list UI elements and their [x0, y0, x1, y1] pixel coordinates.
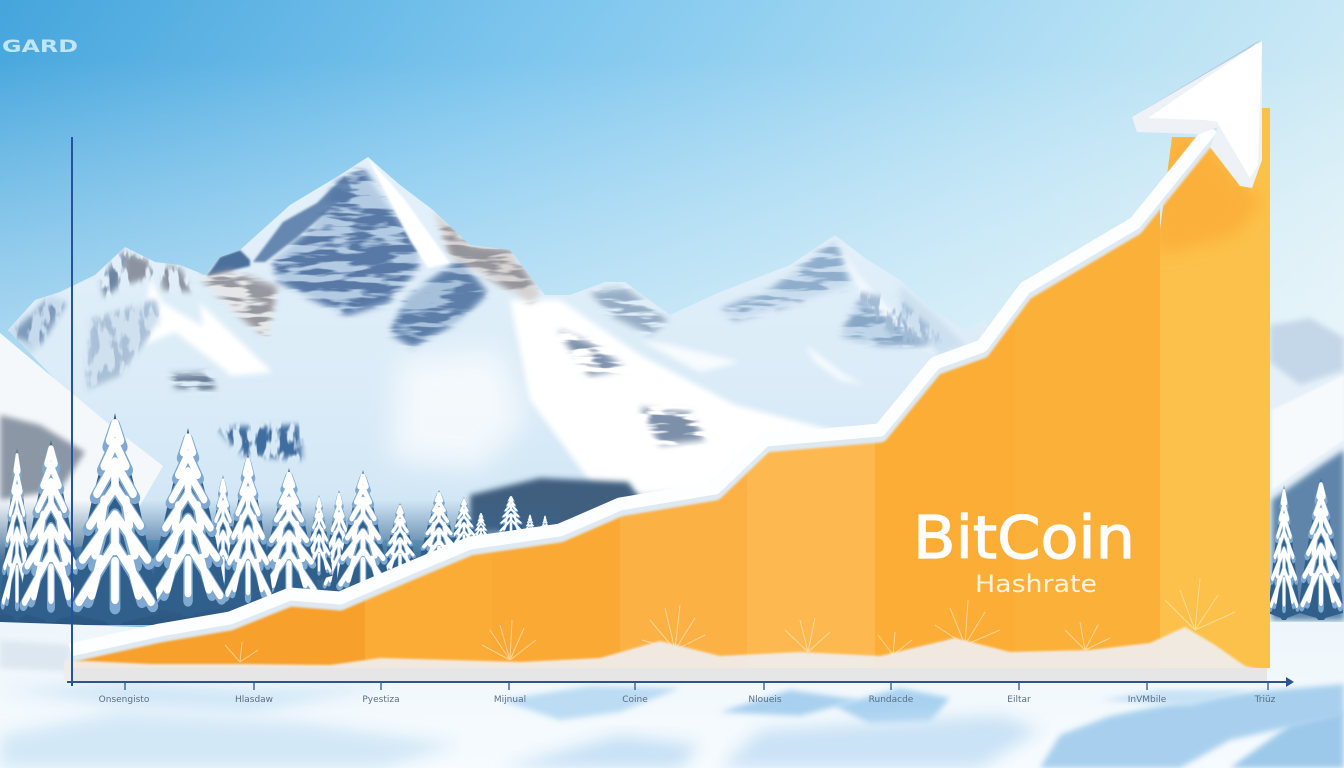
- x axis labels: InVMbile: [1128, 695, 1167, 705]
- tree: [19, 440, 83, 622]
- chart: hashrate area: [64, 100, 1270, 681]
- snow shadows: [0, 682, 400, 712]
- frost bursts: [225, 578, 1235, 662]
- far right mountains: [1265, 318, 1344, 620]
- x axis labels: [99, 695, 1276, 705]
- lighter right panel: [1160, 108, 1270, 668]
- x axis with arrow: [67, 677, 1294, 690]
- tree: [206, 475, 240, 595]
- rock base tones: [8, 168, 965, 390]
- x axis labels: Rundacde: [869, 695, 914, 705]
- x axis labels: Nloueis: [748, 695, 782, 705]
- tree: [540, 515, 550, 535]
- tree: [1, 448, 33, 620]
- trend arrow head: [1132, 40, 1262, 188]
- tree: [306, 495, 332, 580]
- tree: [336, 470, 390, 598]
- tree: [524, 514, 536, 536]
- snow bank along chart base: [64, 627, 1262, 681]
- title: BitCoin Hashrate: Hashrate: [975, 570, 1097, 598]
- snow body of the range: [8, 157, 1000, 540]
- tree: [223, 453, 273, 611]
- mountain range: [8, 157, 1000, 540]
- tree: [472, 512, 490, 546]
- valley forest: [470, 478, 640, 532]
- left foreground slope: [0, 333, 163, 560]
- tree: [419, 490, 459, 572]
- x axis labels: Mijnual: [494, 695, 526, 705]
- title: BitCoin Hashrate: [913, 503, 1135, 598]
- tree: [499, 495, 523, 535]
- dark skyline ridges: [207, 176, 352, 276]
- tree: [259, 468, 319, 604]
- tree: [72, 413, 158, 625]
- horizontal rock strata: [170, 168, 930, 445]
- x axis labels: Hlasdaw: [235, 695, 273, 705]
- x axis labels: Triüz: [1254, 695, 1276, 705]
- white trend band: [70, 132, 1212, 654]
- snowy ground: [0, 612, 1344, 768]
- tree: [150, 428, 226, 616]
- tree: [451, 497, 477, 552]
- right trees: [1269, 478, 1343, 620]
- tree: [383, 503, 417, 578]
- logo: GARD: GARD: [2, 37, 78, 57]
- tree: [1269, 485, 1299, 620]
- soft snow glow in the central basin: [390, 350, 525, 470]
- title: BitCoin Hashrate: BitCoin: [913, 503, 1135, 572]
- tree: [1299, 478, 1343, 620]
- x axis labels: Pyestiza: [362, 695, 400, 705]
- sunlit main ridge: [368, 158, 450, 268]
- x axis labels: Onsengisto: [99, 695, 150, 705]
- sunlit snow faces: [146, 262, 933, 494]
- forest of snowy trees: [0, 413, 560, 625]
- x axis labels: Eiltar: [1007, 695, 1031, 705]
- x axis labels: Coine: [622, 695, 648, 705]
- orange bands: [75, 207, 1160, 668]
- steep rock gullies: [10, 250, 945, 460]
- y axis: [71, 137, 73, 686]
- tree: [323, 490, 355, 595]
